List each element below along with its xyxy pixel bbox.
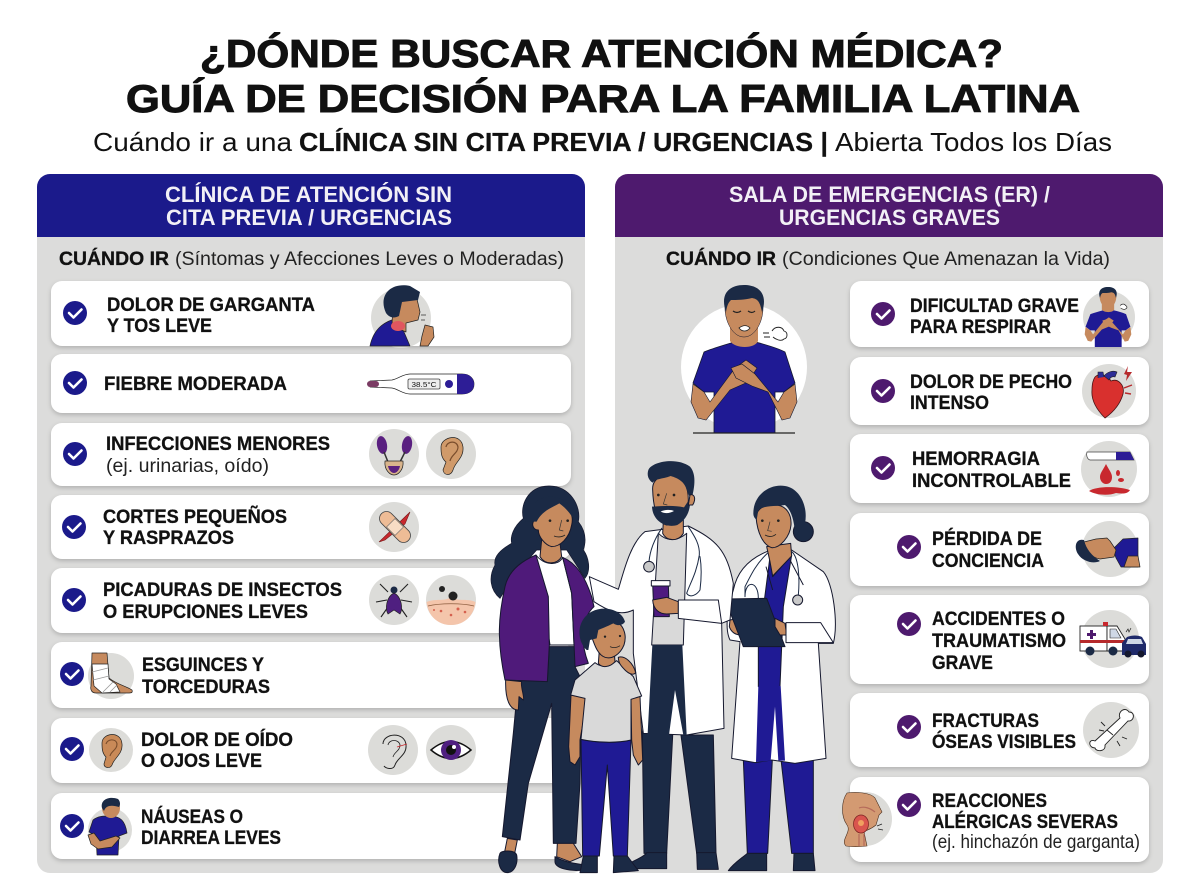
icon: eye <box>426 725 476 775</box>
subtitle: Abierta Todos los Días <box>835 127 1112 157</box>
subtitle: CLÍNICA SIN CITA PREVIA / URGENCIAS | <box>299 127 828 157</box>
label: DIFICULTAD GRAVE <box>910 295 1079 317</box>
card: insect bites <box>51 568 571 633</box>
icon: ambulance and car <box>1080 610 1146 668</box>
panel header: emergency room <box>615 174 1163 237</box>
figure: child <box>569 609 643 873</box>
panel: emergency room <box>615 174 1163 873</box>
icon: broken bone <box>1083 702 1139 758</box>
label: PICADURAS DE INSECTOS <box>103 579 342 601</box>
label: DIARREA LEVES <box>141 827 281 849</box>
check icon <box>897 535 921 559</box>
label: (ej. hinchazón de garganta) <box>932 831 1140 853</box>
check icon <box>63 371 87 395</box>
label: PARA RESPIRAR <box>910 316 1051 338</box>
illustration: person with chest pain <box>681 285 807 433</box>
card: sore throat <box>51 281 571 348</box>
label: O OJOS LEVE <box>141 750 262 772</box>
label: ALÉRGICAS SEVERAS <box>932 810 1118 833</box>
panel header: clinic <box>37 174 585 237</box>
label: INFECCIONES MENORES <box>106 433 330 455</box>
check icon <box>60 814 84 838</box>
icon: insect <box>369 575 419 625</box>
check icon <box>897 793 921 817</box>
label: O ERUPCIONES LEVES <box>103 601 308 623</box>
title: GUÍA DE DECISIÓN PARA LA FAMILIA LATINA <box>126 77 1080 121</box>
panel: clinic <box>37 174 585 873</box>
section label: when to go, ER <box>666 247 1110 270</box>
card: chest pain <box>850 357 1149 425</box>
label: HEMORRAGIA <box>912 448 1040 470</box>
check icon <box>897 715 921 739</box>
label: Y TOS LEVE <box>107 315 212 337</box>
card: fever <box>51 354 571 413</box>
card: sprains <box>51 642 571 708</box>
label: ÓSEAS VISIBLES <box>932 729 1076 753</box>
label: REACCIONES <box>932 790 1047 812</box>
check icon <box>63 301 87 325</box>
section label: when to go, clinic: (Síntomas y Afecciones Leves o Moderadas) <box>175 248 564 270</box>
label <box>106 433 330 477</box>
label: CORTES PEQUEÑOS <box>103 505 287 528</box>
section label: when to go, ER: (Condiciones Que Amenazan la Vida) <box>782 248 1110 270</box>
label <box>910 371 1072 414</box>
section label: when to go, clinic: CUÁNDO IR <box>59 247 169 270</box>
label: (ej. urinarias, oído) <box>106 455 269 477</box>
check icon <box>62 515 86 539</box>
check icon <box>60 662 84 686</box>
title: ¿DÓNDE BUSCAR ATENCIÓN MÉDICA? <box>200 32 1003 76</box>
subtitle: Cuándo ir a una <box>93 127 293 157</box>
icon: heart <box>1082 364 1136 418</box>
card: uncontrolled bleeding <box>850 434 1149 503</box>
icon: thermometer: 38.5°C <box>412 380 437 389</box>
card: accidents or trauma <box>850 595 1149 684</box>
card: loss of consciousness <box>850 513 1149 586</box>
figure: mother <box>491 486 594 873</box>
label <box>912 448 1071 492</box>
icon: kidneys <box>369 429 419 479</box>
label: DOLOR DE PECHO <box>910 371 1072 393</box>
label <box>142 654 270 698</box>
icon: unconscious person <box>1076 521 1140 577</box>
label <box>141 728 293 772</box>
panel header: emergency room: URGENCIAS GRAVES <box>779 205 1000 230</box>
card: difficulty breathing <box>850 281 1149 347</box>
label: DOLOR DE GARGANTA <box>107 294 315 316</box>
label: DOLOR DE OÍDO <box>141 728 293 751</box>
check icon <box>62 588 86 612</box>
check icon <box>63 442 87 466</box>
panel header: clinic: CITA PREVIA / URGENCIAS <box>166 205 452 230</box>
icon: coughing person <box>370 285 434 348</box>
icon: ear <box>89 728 133 772</box>
check icon <box>871 456 895 480</box>
check icon <box>871 302 895 326</box>
label <box>932 710 1076 753</box>
label: CONCIENCIA <box>932 550 1044 572</box>
label <box>103 505 287 549</box>
section label: when to go, ER: CUÁNDO IR <box>666 247 776 270</box>
icon: thermometer <box>367 374 474 394</box>
check icon <box>871 379 895 403</box>
card: ear or eye pain <box>51 718 571 783</box>
illustration: family with doctors <box>491 461 835 873</box>
label: ESGUINCES Y <box>142 654 264 676</box>
figure: male doctor <box>589 461 733 869</box>
label: GRAVE <box>932 652 993 674</box>
icon: bandaged ankle <box>88 653 134 699</box>
label: FIEBRE MODERADA <box>104 373 287 395</box>
label: INTENSO <box>910 392 989 414</box>
card: severe allergic reactions <box>838 777 1149 862</box>
card: cuts <box>51 495 571 559</box>
icon: ear outline <box>368 725 418 775</box>
label <box>932 527 1044 572</box>
icon: swollen throat <box>838 792 892 847</box>
label <box>103 579 342 623</box>
subtitle <box>93 127 1112 157</box>
card: nausea <box>51 793 571 859</box>
label: NÁUSEAS O <box>141 805 243 828</box>
label: Y RASPRAZOS <box>103 527 234 549</box>
icon: ear <box>426 429 476 479</box>
label <box>932 608 1066 674</box>
label: FRACTURAS <box>932 710 1039 732</box>
title <box>126 32 1080 121</box>
panel header: clinic: CLÍNICA DE ATENCIÓN SIN <box>165 182 452 207</box>
label <box>107 294 315 337</box>
label <box>141 805 281 849</box>
card: fractures <box>850 693 1149 767</box>
icon: blood and blade <box>1081 441 1137 497</box>
icon: person short of breath <box>1083 287 1135 347</box>
icon: person with nausea <box>88 798 132 855</box>
label: TORCEDURAS <box>142 676 270 698</box>
label: INCONTROLABLE <box>912 470 1071 492</box>
check icon <box>60 737 84 761</box>
icon: bandage <box>369 502 419 552</box>
label: PÉRDIDA DE <box>932 527 1042 550</box>
figure: female doctor <box>725 486 835 871</box>
icon: skin rash <box>426 575 476 625</box>
panel header: emergency room: SALA DE EMERGENCIAS (ER) / <box>729 182 1050 207</box>
check icon <box>897 612 921 636</box>
label: ACCIDENTES O <box>932 608 1065 630</box>
label: TRAUMATISMO <box>932 630 1066 652</box>
label <box>932 790 1140 853</box>
card: minor infections <box>51 423 571 486</box>
label <box>910 295 1079 338</box>
